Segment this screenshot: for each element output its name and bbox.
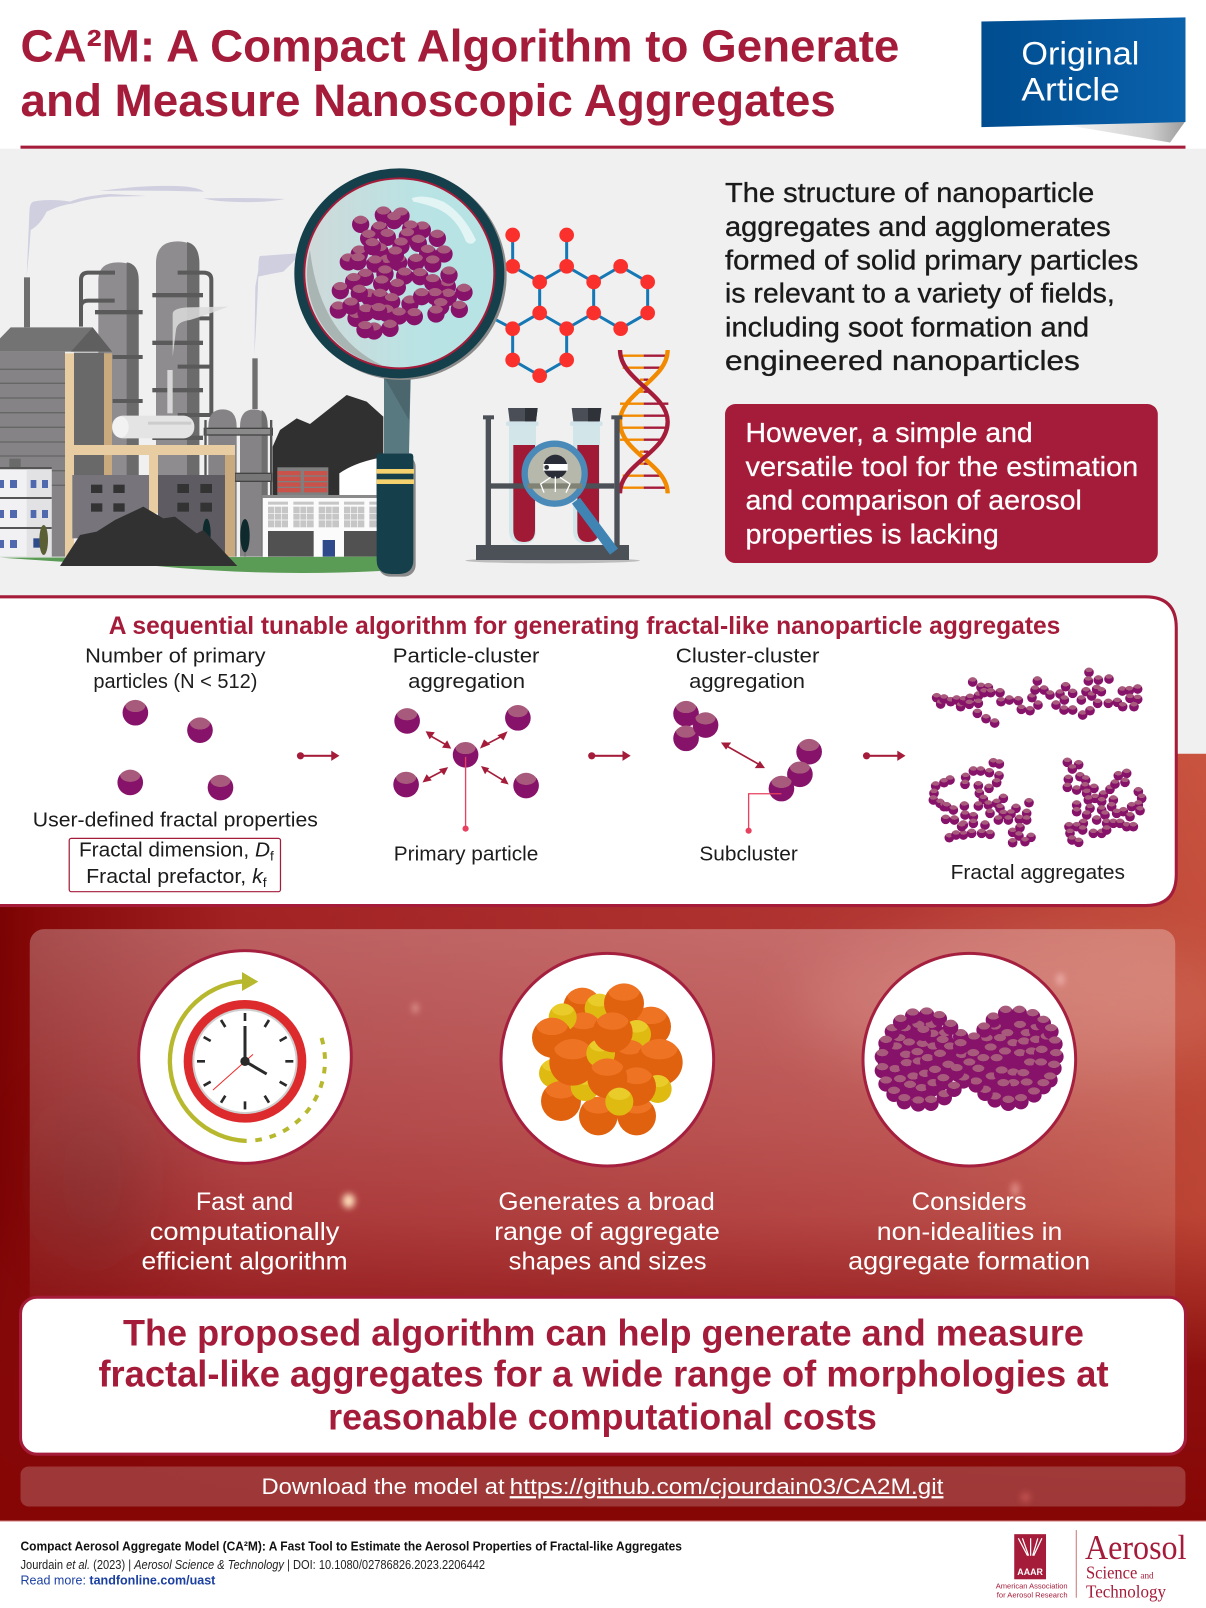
icon: small magnifier [525, 444, 614, 552]
step 3: cluster-cluster aggregation: Subcluster [699, 842, 798, 865]
intro paragraph: The structure of nanoparticle [725, 177, 1094, 208]
benefit: non-idealities: aggregate formation [848, 1249, 1090, 1276]
download bar [21, 1466, 1185, 1506]
citation: Jourdain et al. (2023) | Aerosol Science & Technology | DOI: 10.1080/02786826.2023.2206442 [21, 1557, 485, 1572]
panel: benefits [30, 929, 1175, 1319]
callout: tool is lacking: and comparison of aerosol [746, 485, 1082, 516]
benefit: fast [139, 951, 351, 1276]
step 2: particle-cluster aggregation: aggregation [408, 670, 525, 693]
callout: tool is lacking [725, 404, 1158, 563]
logo: AAAR: AAAR [1017, 1567, 1043, 1577]
left white building [0, 459, 52, 557]
intro paragraph: aggregates and agglomerates [725, 211, 1111, 242]
coal pile [60, 507, 237, 566]
benefit: broad range: range of aggregate [494, 1219, 720, 1246]
footer [0, 1521, 1206, 1608]
title [21, 21, 899, 126]
conclusion box: reasonable computational costs [328, 1397, 877, 1438]
logo: Aerosol Science and Technology: Aerosol [1085, 1528, 1187, 1567]
grass [0, 557, 380, 573]
chimneys [24, 277, 258, 409]
download bar: Download the model at [262, 1474, 505, 1499]
badge: Original Article [981, 17, 1185, 143]
step 2: particle-cluster aggregation: Particle-cluster [393, 644, 540, 667]
illustration: molecule network [490, 228, 655, 383]
conclusion box: fractal-like aggregates for a wide range of morphologies at [98, 1353, 1109, 1394]
icon: DNA helix [620, 350, 668, 493]
callout: tool is lacking: versatile tool for the estimation [746, 451, 1138, 482]
benefit: broad range: shapes and sizes [509, 1249, 707, 1276]
arrow 1 [297, 751, 339, 761]
central white building [263, 495, 378, 557]
conclusion box: The proposed algorithm can help generate and measure [123, 1312, 1084, 1353]
benefit: non-idealities: non-idealities in [877, 1219, 1062, 1246]
step 1: primary particles: Number of primary [85, 644, 266, 667]
step 3: cluster-cluster aggregation: aggregation [689, 670, 805, 693]
citation [21, 1539, 682, 1587]
step 1: primary particles: Fractal prefactor, k [86, 865, 262, 888]
logo: Aerosol Science and Technology [1085, 1528, 1187, 1602]
coal heap back [273, 395, 383, 498]
benefit: fast: computationally [150, 1219, 340, 1246]
citation: Compact Aerosol Aggregate Model (CA²M): A Fast Tool to Estimate the Aerosol Properties of Fractal-like Aggregates [21, 1539, 682, 1554]
citation: Read more: tandfonline.com/uast [21, 1572, 216, 1587]
grey hero background [0, 149, 1206, 754]
conclusion box [21, 1297, 1185, 1454]
title: CA²M: A Compact Algorithm to Generate [21, 21, 899, 72]
step 1: primary particles: particles (N < 512) [93, 670, 257, 693]
intro paragraph: including soot formation and [725, 311, 1089, 342]
badge: Original Article: Original [1021, 35, 1139, 72]
icon: test tube rack [465, 408, 640, 563]
logo: AAAR: American Association [996, 1583, 1068, 1591]
benefit: fast: Fast and [196, 1189, 293, 1216]
illustration: DNA and test tubes [465, 350, 668, 563]
step 1: primary particles: f [263, 875, 267, 890]
main plant building [0, 327, 235, 557]
intro paragraph [725, 177, 1138, 376]
step 2: particle-cluster aggregation [393, 644, 540, 865]
illustration: large magnifier with aggregate [294, 168, 507, 577]
panel: sequential algorithm [0, 597, 1176, 906]
step 2: particle-cluster aggregation: Primary particle [394, 842, 538, 865]
intro paragraph: is relevant to a variety of fields, [725, 278, 1115, 309]
logo: AAAR: for Aerosol Research [997, 1592, 1068, 1600]
download bar: https://github.com/cjourdain03/CA2M.git [510, 1474, 944, 1499]
benefit: broad range [494, 953, 720, 1276]
benefit: broad range: Generates a broad [498, 1189, 715, 1216]
illustration: industrial plant [0, 186, 383, 573]
intro paragraph: formed of solid primary particles [725, 245, 1138, 276]
panel heading: A sequential tunable algorithm for generating fractal-like nanoparticle aggregates [109, 613, 1060, 640]
icon: orange and yellow aggregate [501, 953, 714, 1166]
logo: Aerosol Science and Technology: and [1140, 1570, 1154, 1580]
callout: tool is lacking: However, a simple and [746, 417, 1033, 448]
step 1: primary particles [33, 644, 318, 892]
step 1: primary particles: f [270, 848, 274, 863]
cooling racks [277, 467, 328, 495]
callout: tool is lacking: properties is lacking [746, 519, 999, 550]
fractal aggregates [928, 667, 1146, 884]
step 3: cluster-cluster aggregation: Cluster-cluster [676, 644, 820, 667]
red textured background [0, 754, 1206, 1521]
benefit: non-idealities [848, 953, 1090, 1276]
fractal aggregates: Fractal aggregates [951, 861, 1125, 884]
arrow 3 [863, 751, 906, 761]
white tank [112, 416, 194, 438]
badge: Original Article: Article [1021, 71, 1120, 108]
step 1: primary particles: Fractal dimension, D [79, 838, 270, 861]
title: and Measure Nanoscopic Aggregates [21, 75, 836, 126]
step 3: cluster-cluster aggregation [673, 644, 822, 865]
smoke plumes [27, 186, 297, 355]
benefit: non-idealities: Considers [912, 1189, 1027, 1216]
benefit: fast: efficient algorithm [142, 1249, 348, 1276]
dome [339, 458, 377, 497]
icon: clock [139, 951, 351, 1163]
arrow 2 [588, 751, 631, 761]
step 1: primary particles: User-defined fractal properties [33, 809, 318, 832]
logo: AAAR [996, 1534, 1068, 1600]
logo: Aerosol Science and Technology: Science [1086, 1562, 1138, 1582]
distillation towers [81, 241, 272, 557]
handle [377, 377, 416, 577]
icon: colliding aggregates [863, 953, 1076, 1166]
intro paragraph: engineered nanoparticles [725, 345, 1080, 376]
lens highlight [412, 196, 476, 244]
logo: Aerosol Science and Technology: Technology [1086, 1582, 1166, 1602]
trees [39, 519, 250, 557]
